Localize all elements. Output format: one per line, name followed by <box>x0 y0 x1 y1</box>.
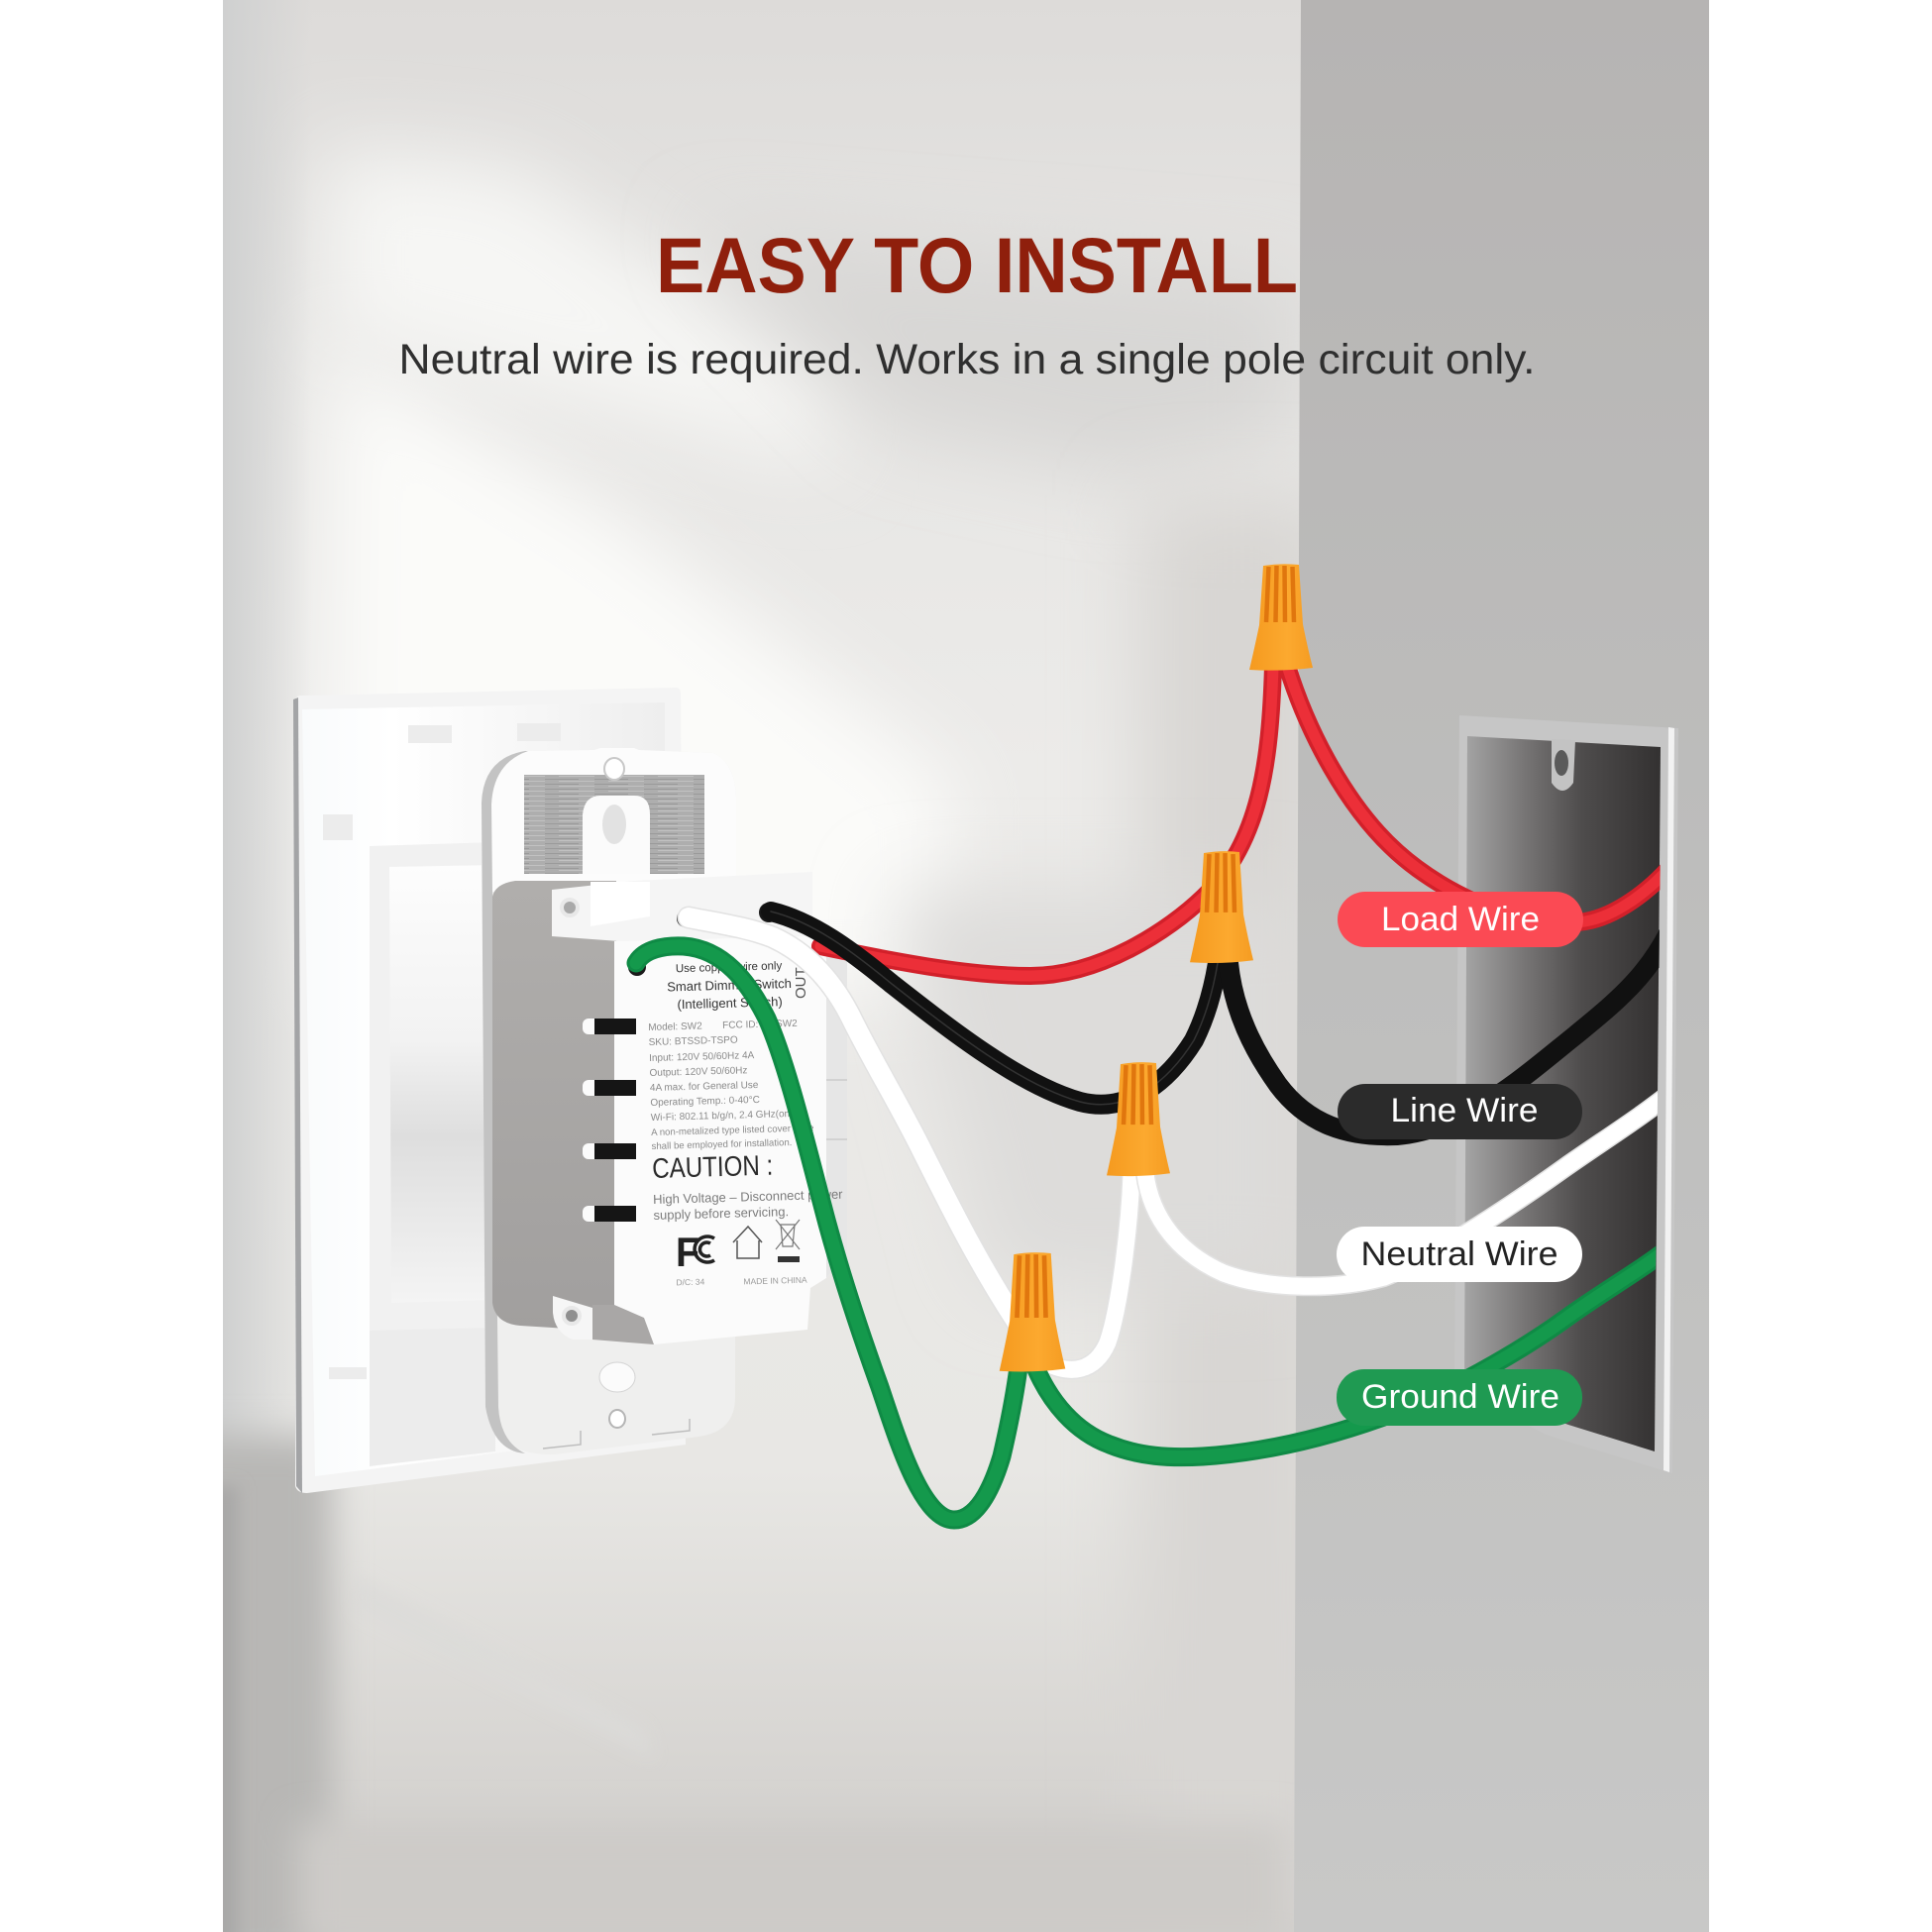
product label text: CAUTION : <box>652 1150 774 1185</box>
product label text: Input: 120V 50/60Hz 4A <box>649 1050 755 1064</box>
product label text: D/C: 34 <box>676 1277 705 1287</box>
subtitle: Neutral wire is required. Works in a single pole circuit only. <box>398 336 1536 383</box>
label: load wire: Load Wire <box>1381 901 1540 938</box>
label: line wire <box>1338 1084 1582 1139</box>
label: ground wire <box>1337 1369 1582 1426</box>
wire nut 3 <box>1107 1062 1170 1176</box>
junction box in wall <box>1454 715 1678 1473</box>
front face <box>614 936 847 1344</box>
label: neutral wire <box>1337 1227 1582 1282</box>
product label text: FCC ID: A2-SW2 <box>722 1019 798 1031</box>
wall plate <box>293 688 686 1493</box>
background walls <box>178 0 1709 1932</box>
product label text: supply before servicing. <box>653 1204 789 1223</box>
vent slots <box>583 1019 636 1222</box>
wire nut 1 <box>1249 564 1313 671</box>
wire entry holes <box>628 903 779 976</box>
side of housing <box>492 881 616 1332</box>
product label text: High Voltage – Disconnect power <box>653 1187 843 1207</box>
product label text: Use copper wire only <box>676 960 783 975</box>
smart switch <box>482 748 847 1454</box>
wire nut 2 <box>1190 851 1253 963</box>
product label text: shall be employed for installation. <box>651 1137 793 1152</box>
icon: FCC logo <box>676 1229 714 1275</box>
product label text: Operating Temp.: 0-40°C <box>650 1095 760 1109</box>
icon: FCC logo: F <box>676 1229 699 1275</box>
product label text: (Intelligent Switch) <box>677 994 783 1012</box>
wire: load red <box>820 666 1674 976</box>
product label text: Output: 120V 50/60Hz <box>649 1065 748 1079</box>
wires <box>628 666 1674 1520</box>
product label text: Wi-Fi: 802.11 b/g/n, 2.4 GHz(only) <box>651 1109 801 1124</box>
product label text: Smart Dimmer Switch <box>667 976 792 994</box>
top face <box>552 872 812 941</box>
label: line wire: Line Wire <box>1391 1092 1538 1129</box>
product label text <box>646 959 846 1289</box>
wire: line black <box>771 912 1674 1135</box>
icon: house <box>733 1227 762 1258</box>
product label text: 4A max. for General Use <box>650 1080 759 1094</box>
infographic canvas <box>223 0 1709 1932</box>
plate clips <box>323 723 561 1449</box>
title: EASY TO INSTALL <box>656 221 1298 309</box>
label: load wire <box>1338 892 1583 947</box>
icon: weee <box>776 1220 800 1249</box>
wire nut 4 <box>1000 1252 1065 1371</box>
wire: neutral white <box>689 917 1674 1369</box>
mounting tab <box>1552 739 1575 791</box>
product label text: MADE IN CHINA <box>743 1275 807 1286</box>
wire: ground green <box>636 946 1674 1520</box>
product label text: SKU: BTSSD-TSPO <box>649 1035 738 1048</box>
label: neutral wire: Neutral Wire <box>1361 1235 1557 1273</box>
label: ground wire: Ground Wire <box>1361 1378 1559 1416</box>
product label text: Model: SW2 <box>648 1020 702 1033</box>
OUT marking: OUT <box>793 967 809 999</box>
yoke plate <box>482 748 736 1454</box>
product label text: A non-metalized type listed cover plate <box>651 1123 814 1138</box>
